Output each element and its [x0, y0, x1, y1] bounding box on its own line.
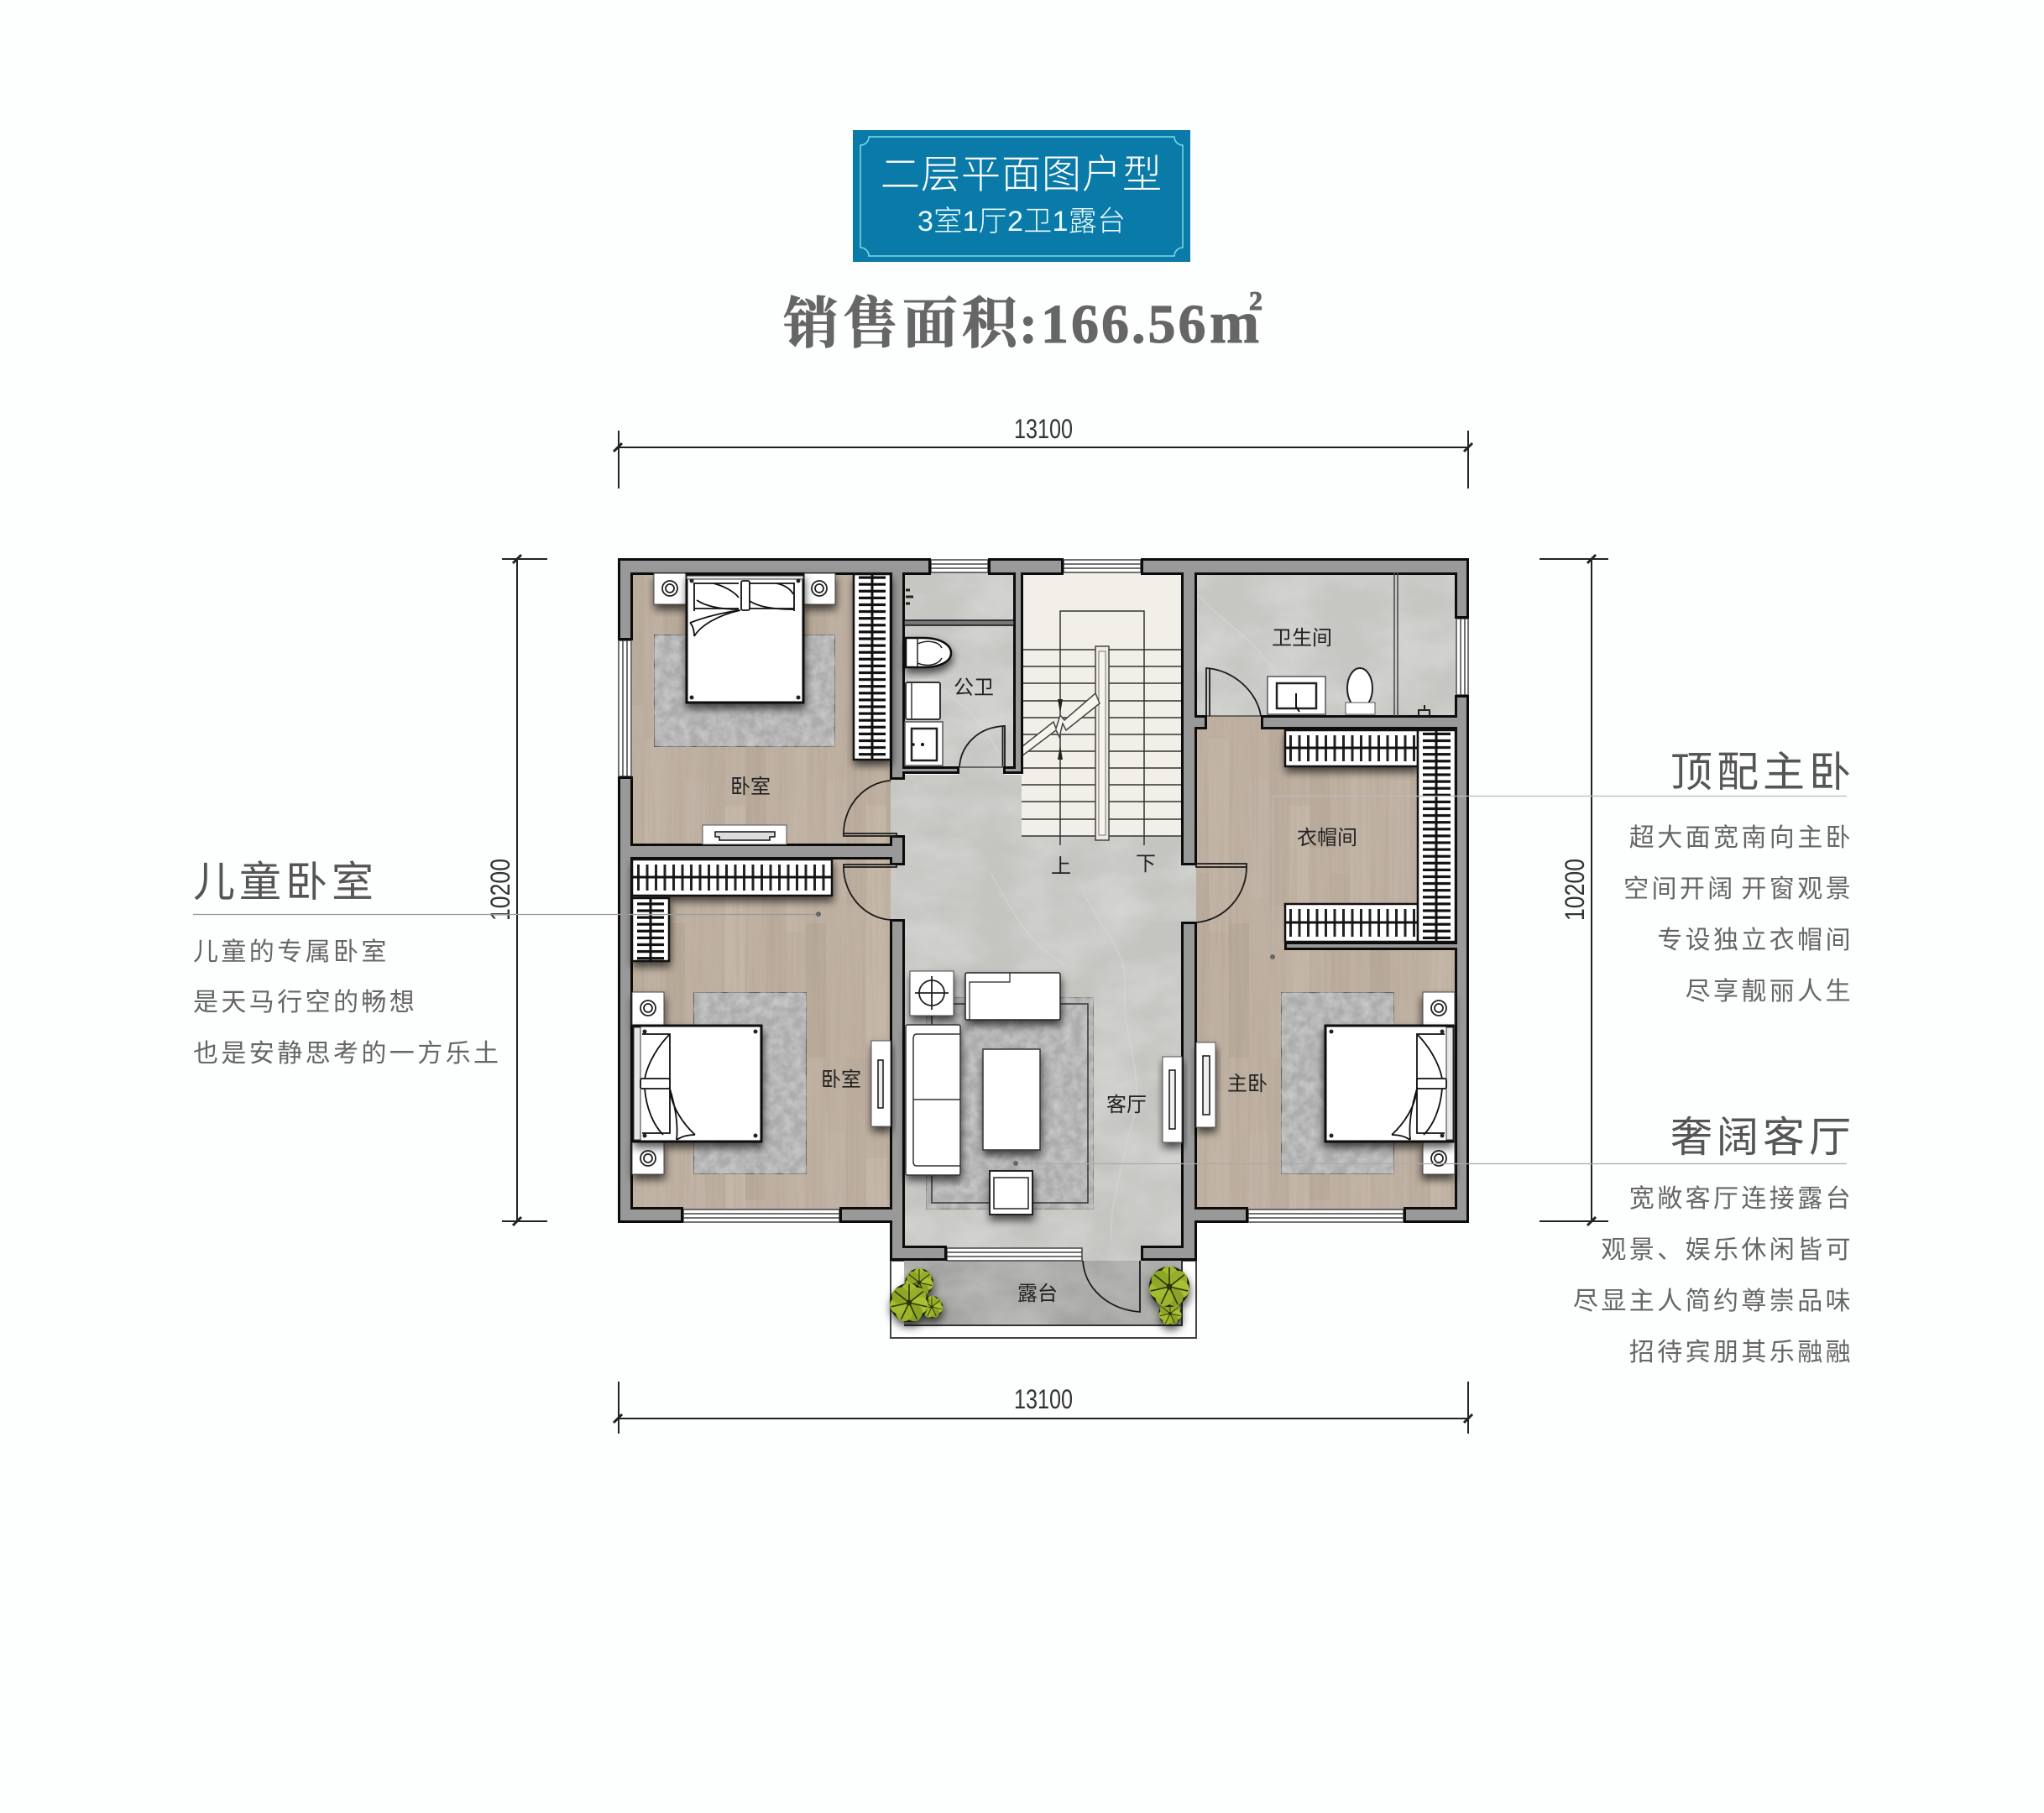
- floor: public bathroom marble: [904, 572, 1014, 768]
- nightstand left: [654, 573, 687, 604]
- callout text: 专设独立衣帽间: [1657, 927, 1853, 954]
- floor: living marble: [891, 766, 1196, 1261]
- sofa: [906, 1025, 960, 1175]
- floor: terrace: [904, 1261, 1182, 1325]
- banner subtitle: 3室1厅2卫1露台: [917, 206, 1126, 238]
- callout text: 也是安静思考的一方乐土: [193, 1040, 501, 1068]
- staircase: [1022, 572, 1182, 845]
- terrace outer boundary: [891, 1261, 1196, 1338]
- windows: [619, 560, 1468, 1261]
- bed frame: [687, 574, 803, 703]
- callout: master bedroom: [1270, 749, 1855, 1006]
- lamp table: [910, 971, 954, 1016]
- coffee table: [983, 1049, 1040, 1150]
- callout: children's bedroom: [193, 859, 821, 1068]
- stair label: down: 下: [1136, 853, 1156, 875]
- floor: bedrooms wood: [632, 572, 1456, 1210]
- dimension: left depth: [485, 555, 547, 1225]
- title banner: [853, 130, 1190, 262]
- room label: bedroom top: 卧室: [730, 776, 771, 798]
- bed: master bedroom: [1325, 992, 1455, 1174]
- wardrobe: lower-left bedroom: [632, 859, 832, 961]
- doors: [844, 668, 1261, 1312]
- dimension: left depth: 10200: [485, 859, 515, 921]
- tv unit: living room: [1163, 1057, 1182, 1142]
- bed: top-left bedroom rug: [654, 635, 835, 747]
- dimension: right depth: [1540, 555, 1608, 1225]
- room label: master bedroom: 主卧: [1227, 1073, 1268, 1095]
- sales area heading: :: [1019, 294, 1038, 355]
- callout text: 宽敞客厅连接露台: [1629, 1185, 1853, 1213]
- callout text: 招待宾朋其乐融融: [1629, 1339, 1853, 1366]
- floor plan: [618, 558, 1469, 1338]
- callout text: 是天马行空的畅想: [193, 989, 417, 1016]
- bed: lower-left bedroom: [632, 992, 761, 1174]
- callout heading: 顶配主卧: [1670, 749, 1855, 796]
- room label: living room: 客厅: [1106, 1094, 1147, 1116]
- dimension: right depth: 10200: [1560, 859, 1590, 921]
- armchair: bottom: [990, 1171, 1032, 1215]
- callout text: [193, 938, 501, 1068]
- tv unit: master bedroom: [1196, 1042, 1215, 1127]
- bed: top-left bedroom: [654, 573, 835, 703]
- sales area heading: m: [1210, 290, 1259, 356]
- callout text: 尽享靓丽人生: [1686, 978, 1853, 1006]
- living room rug: [926, 997, 1094, 1210]
- nightstand right: [802, 573, 835, 604]
- dimension: bottom width: [614, 1382, 1472, 1434]
- plant: right: [1149, 1267, 1189, 1325]
- marble veins: [923, 588, 1284, 1242]
- sales area heading: 销售面积: [783, 294, 1022, 355]
- callout text: 儿童的专属卧室: [193, 938, 389, 966]
- callout heading: 儿童卧室: [193, 859, 378, 906]
- callout text: [1573, 1185, 1853, 1366]
- callout text: 尽显主人简约尊崇品味: [1573, 1288, 1853, 1315]
- room label: master bathroom: 卫生间: [1272, 627, 1332, 650]
- bath threshold lines: [959, 716, 1261, 767]
- rug: lower-left bedroom: [693, 992, 807, 1174]
- dimension: top width: 13100: [1014, 414, 1073, 444]
- sales area heading: 2: [1249, 285, 1262, 316]
- public bathroom fixtures: [905, 590, 951, 765]
- room label: walk-in closet: 衣帽间: [1297, 827, 1357, 849]
- stair label: up: 上: [1051, 855, 1071, 878]
- callout text: 观景、娱乐休闲皆可: [1601, 1236, 1853, 1264]
- rug: master bedroom: [1281, 992, 1394, 1174]
- tv unit: top-left bedroom: [703, 825, 787, 844]
- banner title: 二层平面图户型: [881, 152, 1163, 196]
- wardrobe: top-left bedroom: [854, 574, 891, 760]
- armchair: top: [965, 973, 1060, 1020]
- callout text: 空间开阔 开窗观景: [1623, 875, 1853, 903]
- room label: public bathroom: 公卫: [954, 677, 994, 699]
- sales area heading: 166.56: [1041, 294, 1209, 355]
- callout: living room: [1013, 1114, 1855, 1366]
- dimension: top width: [614, 414, 1472, 489]
- floor: master bathroom marble: [1196, 572, 1456, 716]
- room label: bedroom lower: 卧室: [821, 1068, 861, 1091]
- master bathroom fixtures: [1268, 572, 1430, 716]
- callout text: [1623, 824, 1853, 1006]
- tv unit: lower-left bedroom: [871, 1041, 891, 1126]
- dimension: bottom width: 13100: [1014, 1384, 1073, 1414]
- plant: left: [890, 1268, 943, 1322]
- walls: [618, 558, 1469, 1261]
- walk-in closet racks: [1285, 730, 1456, 942]
- room label: terrace: 露台: [1017, 1283, 1058, 1305]
- callout heading: 奢阔客厅: [1670, 1114, 1855, 1161]
- callout text: 超大面宽南向主卧: [1629, 824, 1853, 852]
